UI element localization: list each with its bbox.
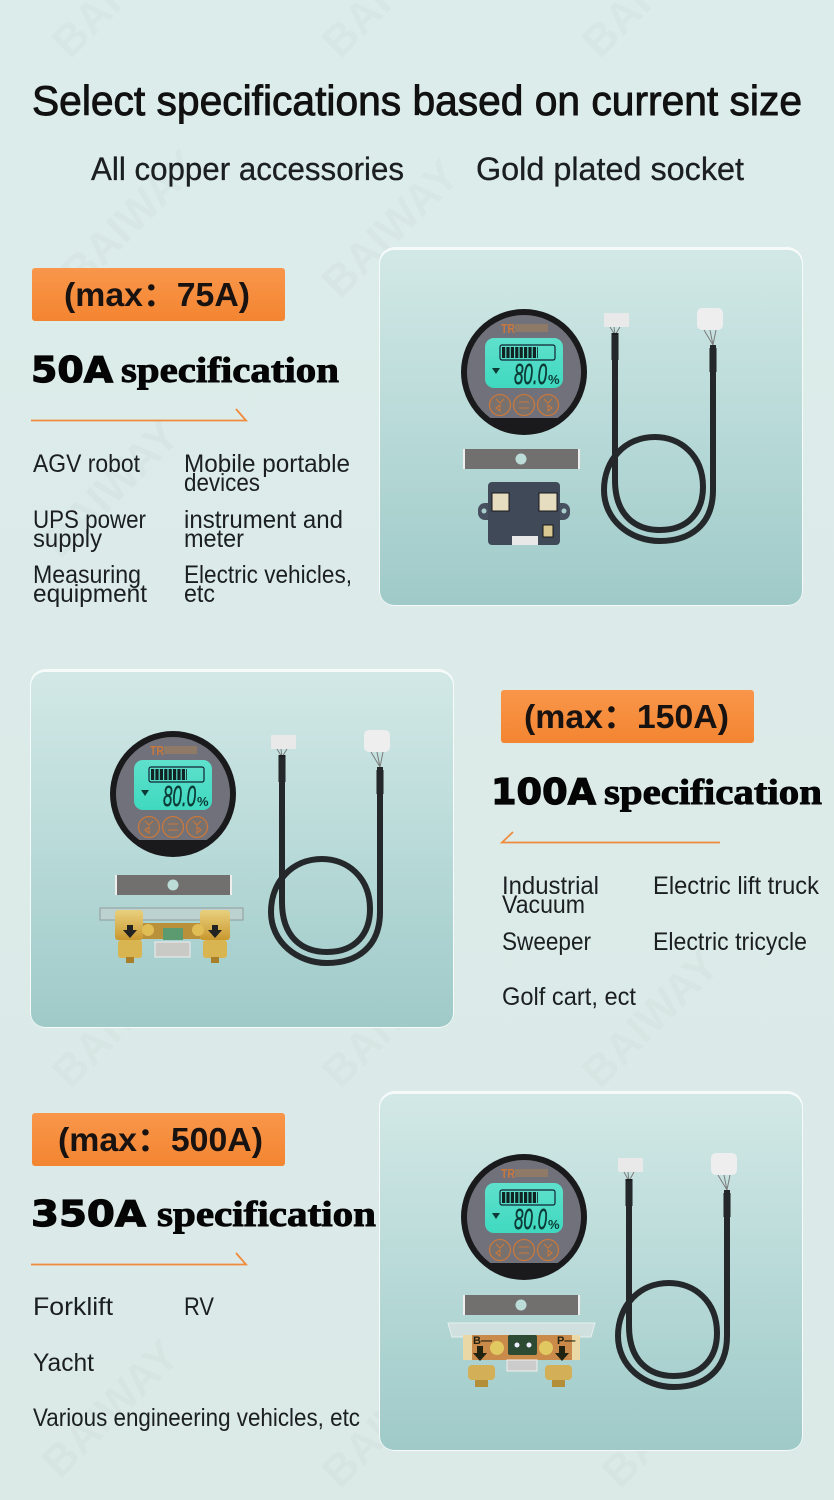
icon: battery meter xyxy=(110,731,236,857)
subtitle: all copper accessories: All copper accessories xyxy=(91,151,404,187)
panel: 350A product photo xyxy=(379,1091,803,1451)
title: Select specifications based on current size xyxy=(32,77,802,124)
badge: max 75A xyxy=(32,268,285,321)
icon: mounting bracket xyxy=(115,875,232,895)
icon: cable xyxy=(604,308,723,541)
icon: mounting bracket xyxy=(463,1295,580,1315)
heading: 100A specification: 100A xyxy=(491,772,596,813)
icon: 350A shunt xyxy=(448,1323,595,1387)
icon: battery meter: TR xyxy=(150,743,164,758)
applications list: Vacuum xyxy=(502,891,585,919)
icon: battery meter: 80.0 xyxy=(514,359,547,391)
icon: cable xyxy=(271,730,390,963)
applications list: Measuring xyxy=(33,561,141,589)
icon: battery meter: % xyxy=(548,1217,560,1232)
heading: 100A specification: specification xyxy=(604,772,822,812)
applications list: Yacht xyxy=(33,1349,94,1377)
icon: 100A shunt xyxy=(100,908,243,963)
applications list: Electric lift truck xyxy=(653,872,819,900)
badge: max 75A: (max：75A) xyxy=(64,276,250,313)
heading: 50A specification: 50A xyxy=(31,350,113,391)
icon: battery meter xyxy=(461,1154,587,1280)
applications list: RV xyxy=(184,1293,214,1321)
heading: 50A specification: specification xyxy=(121,350,339,390)
arrow line xyxy=(502,832,720,842)
applications list: meter xyxy=(184,525,244,553)
applications list: instrument and xyxy=(184,506,343,534)
applications list: Electric tricycle xyxy=(653,928,807,956)
badge: max 500A xyxy=(32,1113,285,1166)
badge: max 150A: (max：150A) xyxy=(524,698,729,735)
applications list xyxy=(33,450,352,608)
heading: 100A specification xyxy=(491,772,822,813)
applications list: equipment xyxy=(33,580,147,608)
badge: max 500A: (max：500A) xyxy=(58,1121,263,1158)
heading: 350A specification xyxy=(31,1194,376,1235)
icon: battery meter: 80.0 xyxy=(163,781,196,813)
applications list: Sweeper xyxy=(502,928,591,956)
applications list: Mobile portable xyxy=(184,450,350,478)
heading: 350A specification: 350A xyxy=(31,1194,146,1235)
panel: 100A specification text xyxy=(491,690,822,1011)
panel: 50A product photo xyxy=(379,247,803,606)
heading: 50A specification xyxy=(31,350,339,391)
icon: battery meter: TR xyxy=(501,1166,515,1181)
icon: 50A shunt xyxy=(478,482,570,545)
panel: 100A product photo xyxy=(30,669,454,1028)
icon: battery meter: 80.0 xyxy=(514,1204,547,1236)
badge: max 150A xyxy=(501,690,754,743)
icon: battery meter: % xyxy=(548,372,560,387)
arrow line xyxy=(31,409,246,420)
heading: 350A specification: specification xyxy=(157,1194,376,1234)
icon: cable xyxy=(618,1153,737,1387)
applications list: Industrial xyxy=(502,872,599,900)
panel: 350A specification text xyxy=(31,1113,376,1432)
applications list: UPS power xyxy=(33,506,146,534)
icon: 350A shunt: P— xyxy=(557,1335,575,1347)
panel: 50A specification text xyxy=(31,268,352,608)
applications list: Various engineering vehicles, etc xyxy=(33,1404,360,1432)
applications list: etc xyxy=(184,580,215,608)
applications list: Forklift xyxy=(33,1293,113,1321)
applications list xyxy=(33,1293,360,1432)
applications list: AGV robot xyxy=(33,450,140,478)
icon: battery meter xyxy=(461,309,587,435)
icon: battery meter: TR xyxy=(501,321,515,336)
subtitle: gold plated socket: Gold plated socket xyxy=(476,151,744,187)
applications list: devices xyxy=(184,469,260,497)
applications list: Electric vehicles, xyxy=(184,561,352,589)
arrow line xyxy=(31,1253,246,1264)
icon: 350A shunt: B— xyxy=(473,1335,492,1347)
applications list xyxy=(502,872,819,1011)
applications list: supply xyxy=(33,525,102,553)
icon: mounting bracket xyxy=(463,449,580,469)
icon: battery meter: % xyxy=(197,794,209,809)
applications list: Golf cart, ect xyxy=(502,983,636,1011)
